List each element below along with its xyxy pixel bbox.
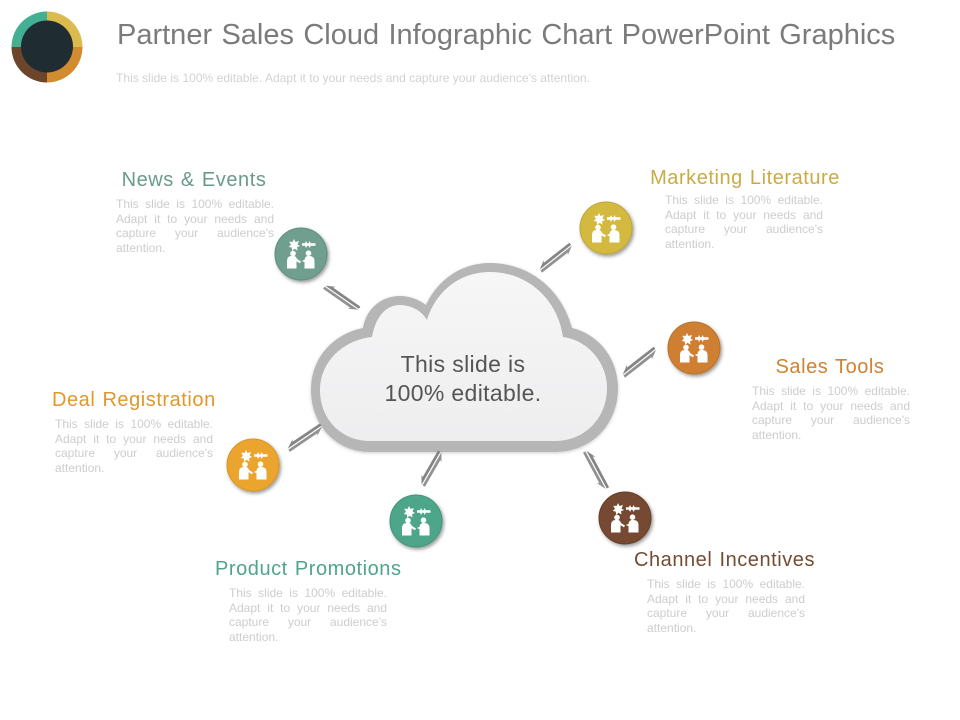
icon: Marketing Literature badge — [580, 202, 632, 254]
label: Channel Incentives — [634, 549, 815, 635]
icon: Product Promotions badge — [390, 495, 442, 547]
label: Deal Registration — [52, 389, 216, 475]
description: This slide is 100% editable. Adapt it to your needs and capture your audience's attention. — [116, 197, 274, 255]
arrow: Channel Incentives — [581, 448, 611, 491]
description: This slide is 100% editable. Adapt it to your needs and capture your audience's attention. — [55, 417, 213, 475]
arrow: News and Events — [322, 281, 362, 314]
heading: Sales Tools — [776, 356, 884, 378]
cloud text — [384, 351, 542, 406]
icon: Channel Incentives badge — [599, 492, 651, 544]
heading: Channel Incentives — [634, 549, 815, 571]
title: Partner Sales Cloud Infographic Chart PowerPoint Graphics — [117, 19, 895, 51]
heading: Product Promotions — [215, 558, 402, 580]
arrow: Marketing Literature — [537, 241, 575, 274]
label: Product Promotions — [215, 558, 402, 644]
subtitle: This slide is 100% editable. Adapt it to your needs and capture your audience's attention. — [116, 71, 590, 85]
cloud text: This slide is — [401, 351, 525, 377]
description: This slide is 100% editable. Adapt it to your needs and capture your audience's attention. — [229, 586, 387, 644]
description: This slide is 100% editable. Adapt it to your needs and capture your audience's attention. — [752, 384, 910, 442]
cloud text: 100% editable. — [384, 380, 542, 406]
label: News and Events — [116, 169, 274, 255]
heading: Marketing Literature — [650, 167, 840, 189]
icon: Sales Tools badge — [668, 322, 720, 374]
label: Marketing Literature — [650, 167, 840, 251]
heading: Deal Registration — [52, 389, 216, 411]
cloud shape — [311, 263, 618, 452]
description: This slide is 100% editable. Adapt it to your needs and capture your audience's attention. — [647, 577, 805, 635]
arrow: Deal Registration — [285, 422, 325, 454]
icon: News and Events badge — [275, 228, 327, 280]
icon: Deal Registration badge — [227, 439, 279, 491]
arrow: Product Promotions — [417, 449, 446, 488]
heading: News & Events — [122, 169, 266, 191]
label: Sales Tools — [752, 356, 910, 442]
arrow: Sales Tools — [620, 345, 659, 379]
description: This slide is 100% editable. Adapt it to your needs and capture your audience's attention. — [665, 193, 823, 251]
